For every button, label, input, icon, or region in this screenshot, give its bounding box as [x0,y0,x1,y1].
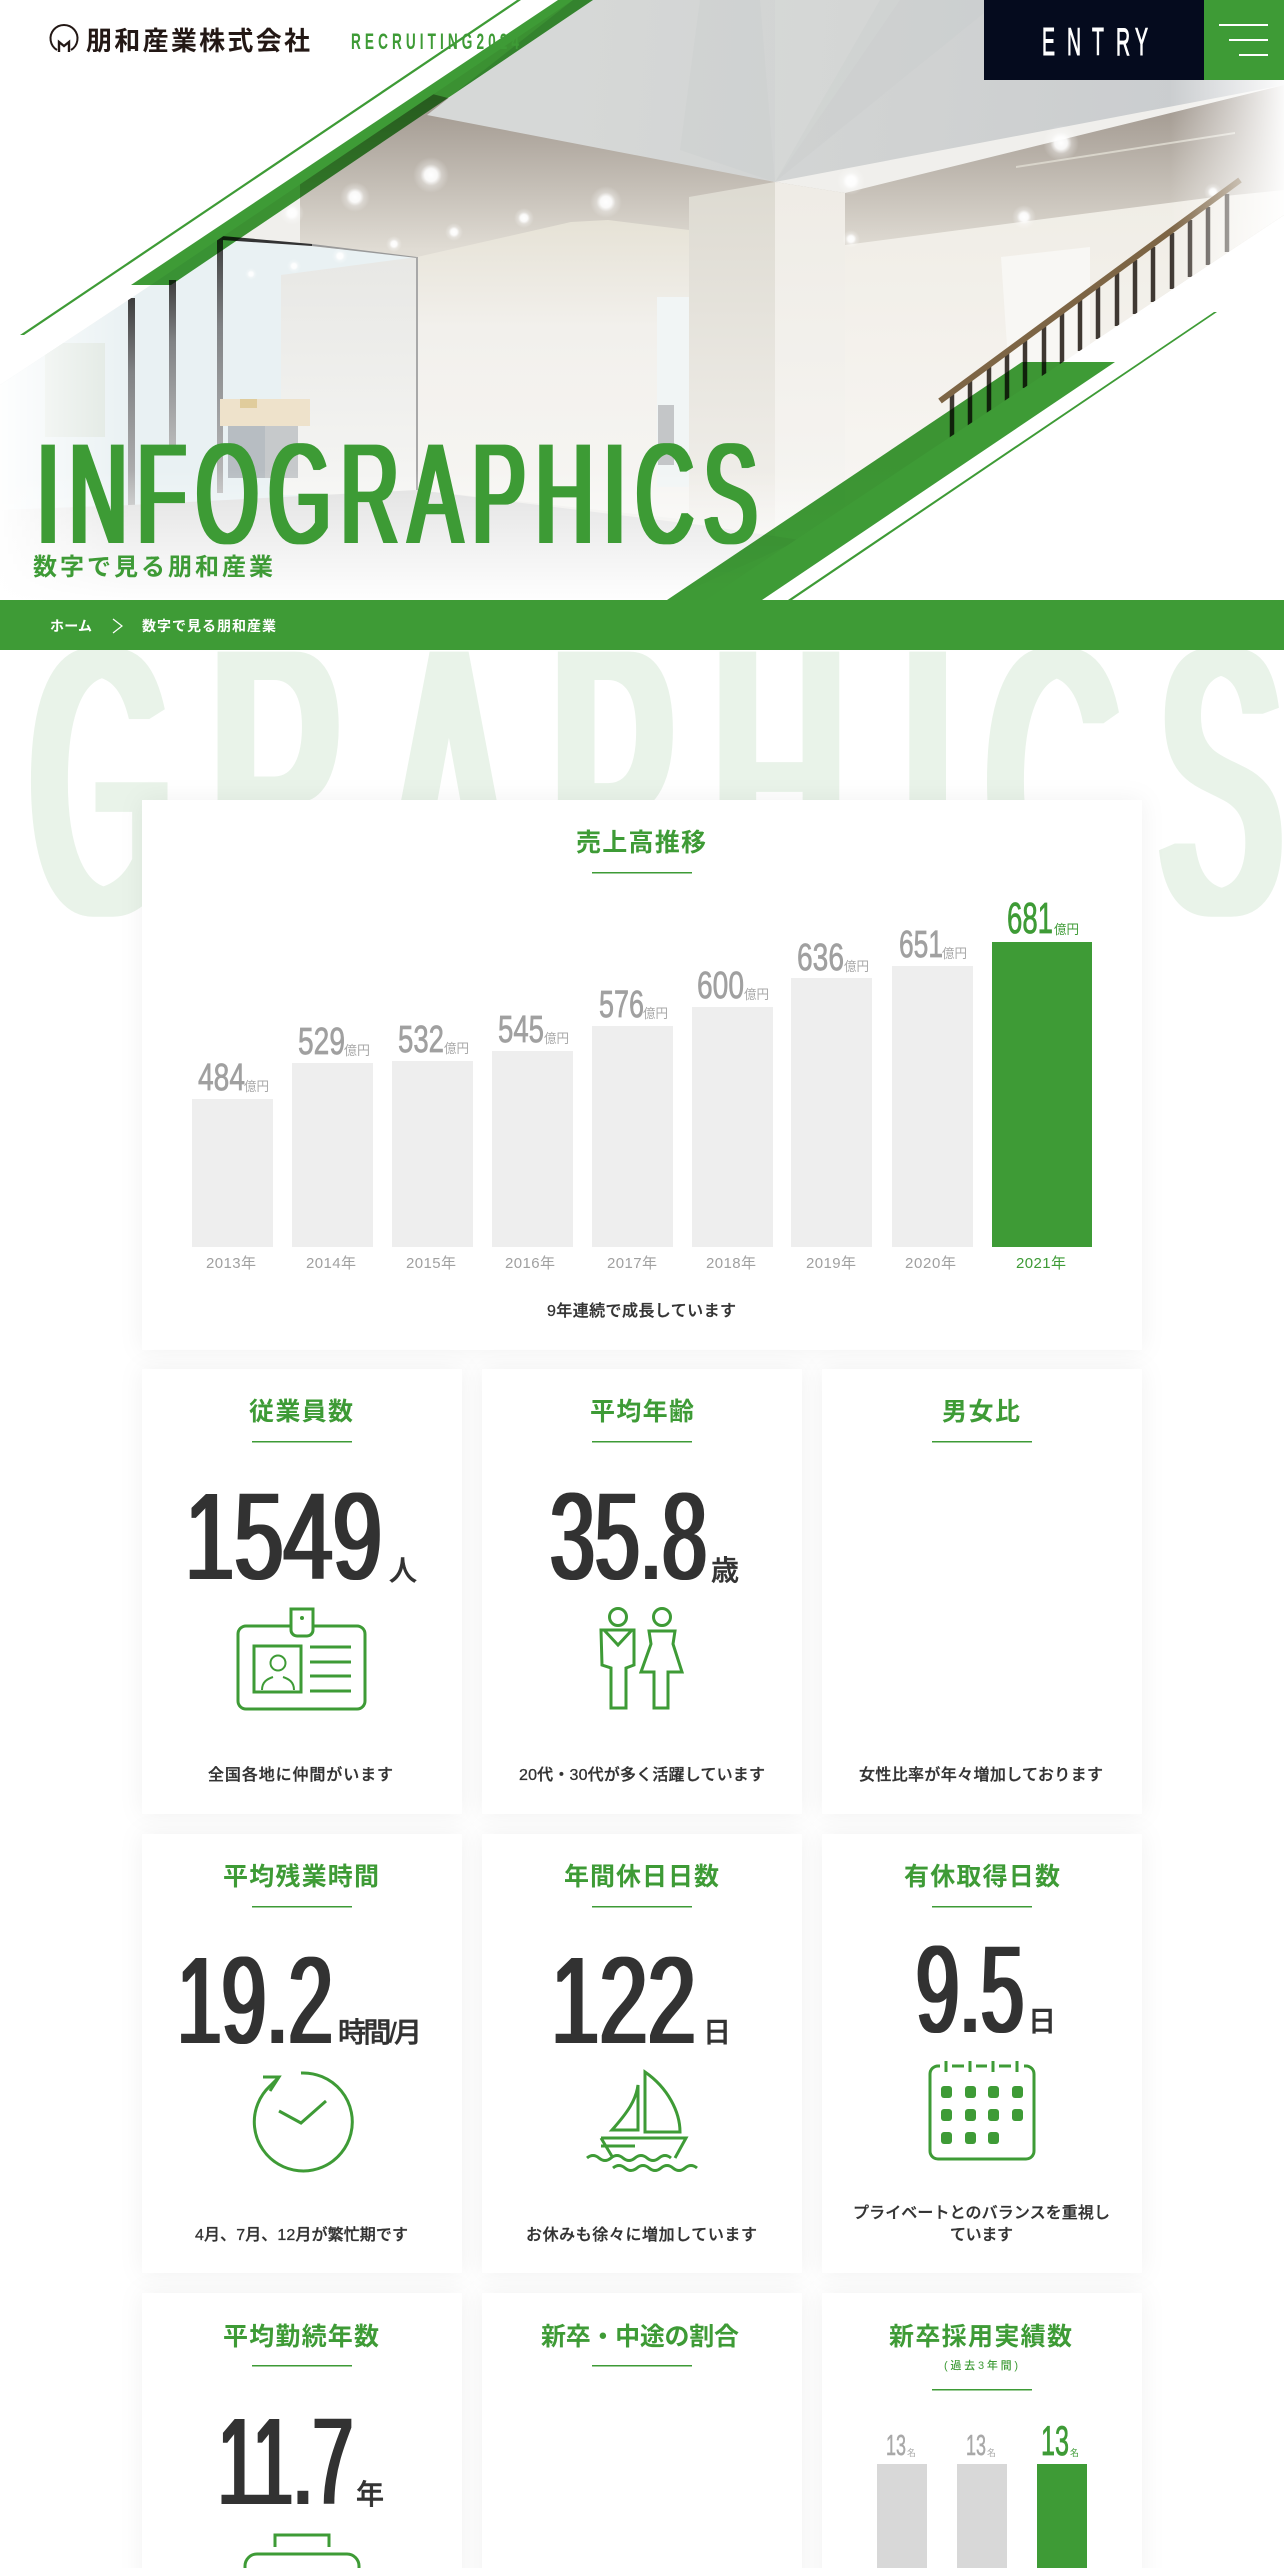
value: 19.2: 時間/月 [338,2017,422,2048]
menu button [1204,0,1284,80]
bar chart: sales by year: 2016年 [505,1255,555,1272]
bar chart: sales by year: 億円 [444,1041,469,1056]
hero subtitle: 数字で見る朋和産業 [33,554,273,581]
bar chart: sales by year: 億円 [643,1006,668,1021]
caption: 4月、7月、12月が繁忙期です [195,2225,408,2244]
breadcrumb bar: 数字で見る朋和産業 [142,618,276,634]
icon: clock [254,2073,352,2171]
bar chart: sales by year: 576 [599,984,644,1026]
bar chart: sales by year: 2014年 [306,1255,356,1272]
panel: annual holidays [482,1834,802,2273]
bar chart: hires: 名 [1070,2447,1079,2458]
entry button: ENTRY [1042,20,1148,64]
panel: paid leave [822,1834,1142,2273]
caption: 全国各地に仲間がいます [208,1765,393,1784]
bar chart: sales by year: 636 [797,937,844,979]
bar chart: sales by year: 億円 [844,959,869,974]
panel: average tenure [142,2293,462,2568]
bar chart: hires: 名 [907,2447,916,2458]
icon: man and woman [601,1608,682,1708]
panel: average age [482,1369,802,1814]
value: 19.2: 19.2 [177,1933,333,2070]
heading: 男女比 [942,1398,1020,1426]
panel: sales trend [142,800,1142,1350]
bar chart: sales by year: 億円 [1054,922,1079,937]
header logo: 朋和産業株式会社 [86,26,310,56]
hero photograph: building lobby [0,0,1284,600]
icon: ID card [238,1609,365,1709]
heading: 有休取得日数 [904,1863,1060,1891]
bar chart: sales by year: 2018年 [706,1255,756,1272]
icon: calendar [930,2061,1034,2159]
bar chart: sales by year: 2021年 [1016,1255,1066,1272]
heading: 従業員数 [249,1398,353,1426]
bar chart: sales by year: 600 [697,965,744,1007]
caption: 20代・30代が多く活躍しています [519,1765,765,1784]
top thin diagonal line [20,0,521,335]
bar chart: sales by year: 2020年 [905,1255,956,1272]
caption: 女性比率が年々増加しております [859,1765,1103,1784]
bar chart: sales by year: 484 [198,1057,245,1099]
heading: 新卒採用実績数 [889,2323,1072,2351]
value: 9.5: 9.5 [916,1922,1024,2059]
panel: overtime [142,1834,462,2273]
caption [853,2204,1110,2244]
panel: employees [142,1369,462,1814]
caption: ています [950,2226,1013,2244]
value: 35.8: 歳 [711,1555,739,1586]
top diagonal green bar [131,0,593,285]
bar chart: sales by year: 2015年 [406,1255,456,1272]
bar chart: sales by year: 億円 [942,946,967,961]
heading: 平均勤続年数 [223,2323,379,2351]
bar chart: hires [877,2417,1087,2568]
lower diagonal green bar [667,362,1115,600]
bar chart: sales by year: 億円 [544,1031,569,1046]
caption: sales: 9年連続で成長しています [547,1302,736,1320]
panel: new graduate hires [822,2293,1142,2568]
recruiting label: RECRUITING2024 [351,29,520,54]
heading: 新卒・中途の割合 [541,2323,739,2351]
bar chart: hires: 13 [966,2430,986,2462]
bar chart: sales by year: 681 [1007,894,1053,943]
bar chart: sales by year: 545 [498,1009,544,1051]
heading: sales trend: 売上高推移 [576,829,706,857]
hero title: INFOGRAPHICS [37,413,757,574]
bar chart: hires: 名 [987,2447,996,2458]
icon: briefcase [245,2535,359,2568]
bar chart: sales by year: 2019年 [806,1255,856,1272]
value: 35.8: 35.8 [550,1469,707,1606]
bar chart: sales by year: 億円 [244,1079,269,1094]
value: 1549: 人 [389,1555,417,1586]
breadcrumb bar: ホーム [50,618,92,634]
value: 122: 日 [703,2017,731,2048]
breadcrumb bar [0,600,1284,650]
bar chart: hires: 13 [1041,2417,1069,2464]
caption: プライベートとのバランスを重視し [853,2204,1110,2222]
bar chart: sales by year: 億円 [344,1043,370,1058]
heading: 年間休日日数 [564,1863,719,1891]
panel: new graduate vs mid-career ratio [482,2293,802,2568]
lower thin diagonal line [788,312,1217,600]
bar chart: sales by year: 2013年 [206,1255,256,1272]
background lettering: GRAPHICS: GRAPHICS [32,569,1280,994]
bar chart: sales by year [192,894,1092,1272]
heading: 平均残業時間 [223,1862,379,1891]
caption: お休みも徐々に増加しています [526,2226,757,2244]
value: 11.7: 年 [356,2479,384,2510]
icon: sailboat [587,2072,697,2170]
bar chart: hires: 13 [886,2430,906,2462]
bar chart: sales by year: 532 [398,1019,444,1061]
heading: 平均年齢 [590,1398,694,1426]
value: 11.7: 11.7 [218,2394,353,2531]
value: 9.5: 日 [1028,2006,1056,2037]
subheading: past three years: (過去3年間) [944,2358,1018,2372]
panel: gender ratio [822,1369,1142,1814]
bar chart: sales by year: 億円 [744,987,769,1002]
bar chart: sales by year: 651 [899,924,943,966]
value: 1549: 1549 [185,1469,382,1606]
bar chart: sales by year: 2017年 [607,1255,657,1272]
bar chart: sales by year: 529 [298,1021,345,1063]
value: 122: 122 [551,1933,696,2070]
entry button [984,0,1204,80]
